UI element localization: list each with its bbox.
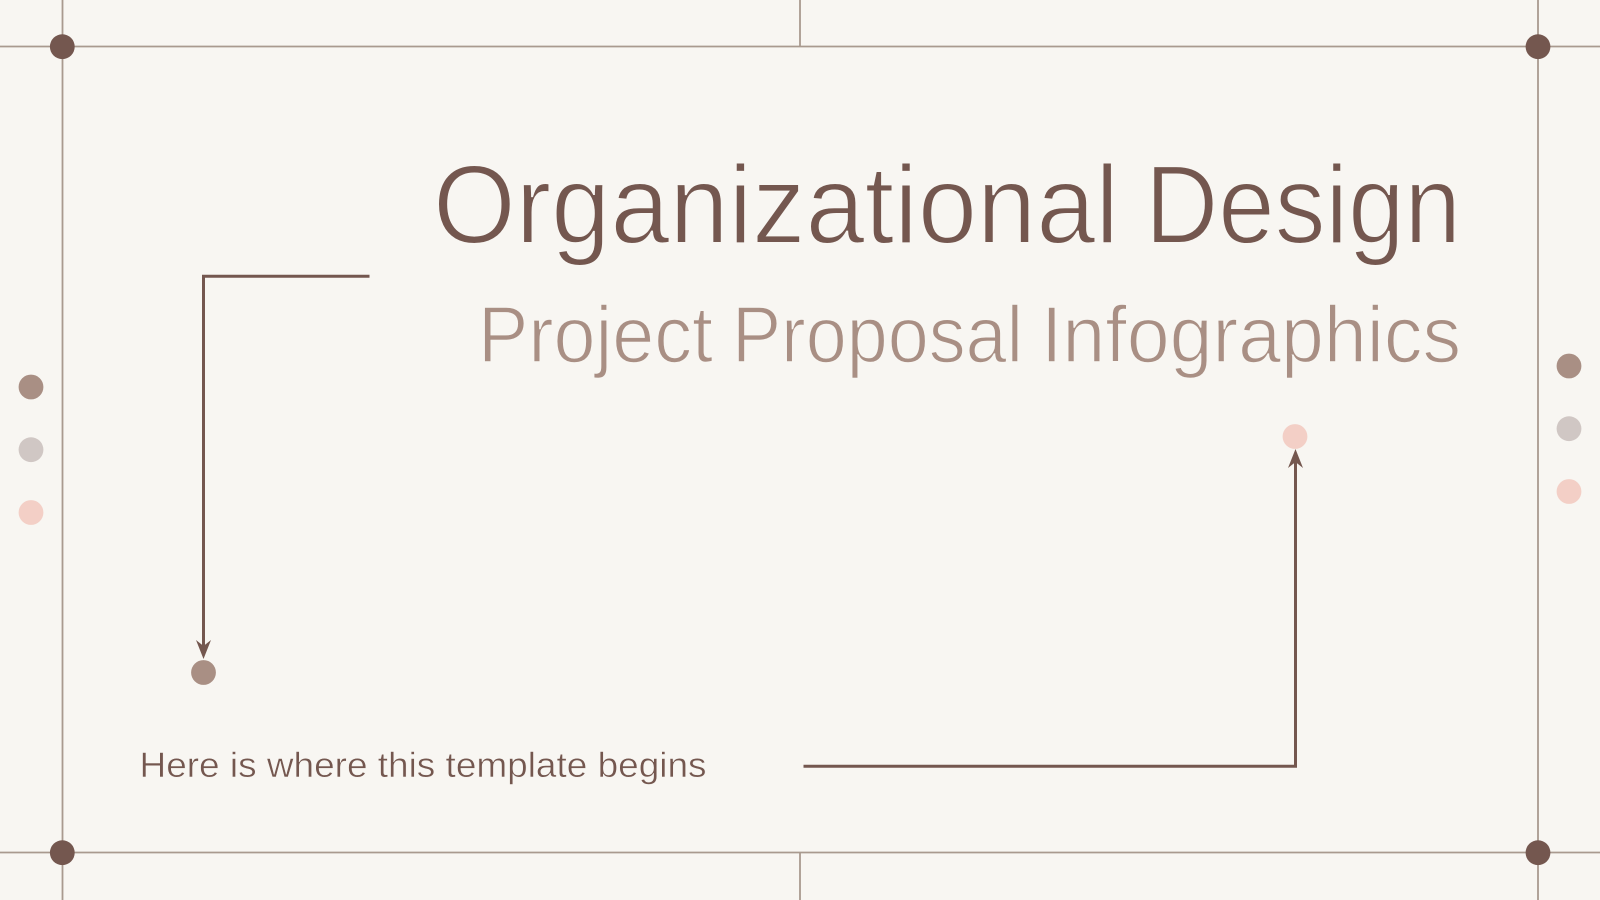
dot: arrow target right [1283, 424, 1307, 449]
subtitle: Project [478, 290, 713, 379]
right dot column [1557, 354, 1581, 504]
arrow: from tagline up to dot [804, 449, 1303, 766]
left dot column [19, 375, 43, 525]
dot: arrow target left [191, 660, 216, 685]
subtitle: Infographics [1041, 290, 1461, 379]
title [433, 143, 1461, 267]
arrow: from title down to dot [196, 276, 370, 659]
tagline: Here is where this template begins [140, 746, 706, 785]
subtitle: Proposal [732, 290, 1023, 379]
subtitle [478, 290, 1461, 379]
title: Organizational [433, 143, 1119, 267]
title: Design [1145, 143, 1461, 267]
